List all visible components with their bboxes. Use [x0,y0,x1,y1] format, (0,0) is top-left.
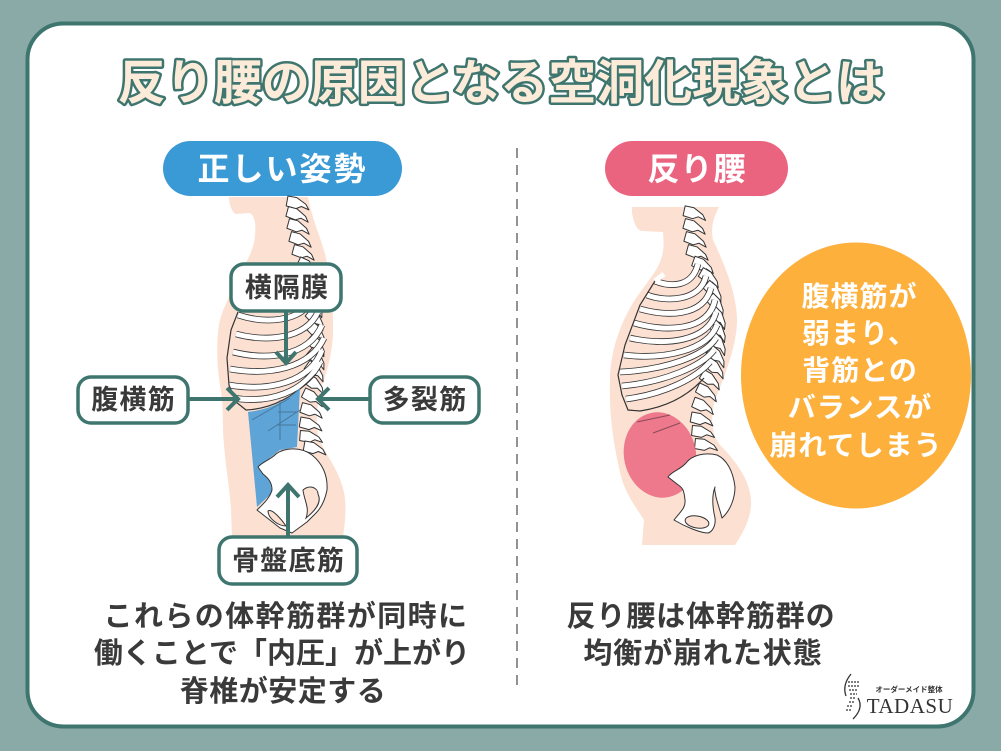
clavicle knob [655,274,664,281]
floating ribs [637,415,680,433]
label: transversus abdominis: 腹横筋 [91,385,176,415]
label: pelvic floor muscles [219,537,357,584]
arrow: diaphragm [276,311,296,363]
logo: TADASU: TADASU [867,694,953,718]
logo: TADASU [845,674,953,719]
text: right explanation: 均衡が崩れた状態 [583,636,823,670]
body silhouette [610,207,751,545]
pelvis notch and opening [268,487,319,526]
callout: orange ellipse: 弱まり、 [802,318,917,349]
weakened muscle highlight [616,405,704,505]
heading: swayback: 反り腰 [647,151,747,187]
callout: orange ellipse: 背筋との [802,355,918,386]
text: left explanation: 働くことで「内圧」が上がり [94,636,470,670]
label: diaphragm [231,264,341,311]
spine [683,206,732,451]
text: left explanation: これらの体幹筋群が同時に [104,599,468,633]
arrow: pelvic floor [277,485,299,537]
deep muscle highlight [248,388,300,507]
callout: orange ellipse [741,242,971,508]
heading: correct posture: 正しい姿勢 [197,151,368,187]
floating ribs in muscle [252,398,300,440]
text: left explanation [94,599,470,708]
figure: swayback skeleton [610,206,751,545]
logo: TADASU: オーダーメイド整体 [875,684,943,694]
text: right explanation [566,600,836,670]
spine [286,196,330,456]
label: pelvic floor muscles: 骨盤底筋 [232,546,345,576]
ribs [618,264,717,411]
label: diaphragm: 横隔膜 [245,273,329,303]
figure: correct posture skeleton [217,196,346,537]
callout: orange ellipse: バランスが [788,391,932,423]
divider: dashed line [516,148,518,692]
pelvis [668,454,735,533]
arrow: multifidus [318,388,370,410]
ribs [227,300,324,410]
label: multifidus [370,377,479,423]
icon: DNA helix [845,674,860,719]
heading: swayback [605,141,788,196]
body silhouette [217,197,346,537]
heading: correct posture [163,141,402,196]
arrow: transversus abdominis [188,388,238,410]
text: right explanation: 反り腰は体幹筋群の [566,600,836,633]
text: left explanation: 脊椎が安定する [180,674,386,708]
pelvis [257,449,327,533]
title: 反り腰の原因となる空洞化現象とは [118,57,884,110]
label: transversus abdominis [78,377,188,423]
label: multifidus: 多裂筋 [383,385,467,415]
callout: orange ellipse: 腹横筋が [801,280,918,312]
callout: orange ellipse: 崩れてしまう [769,430,943,461]
pelvis opening [684,514,710,530]
